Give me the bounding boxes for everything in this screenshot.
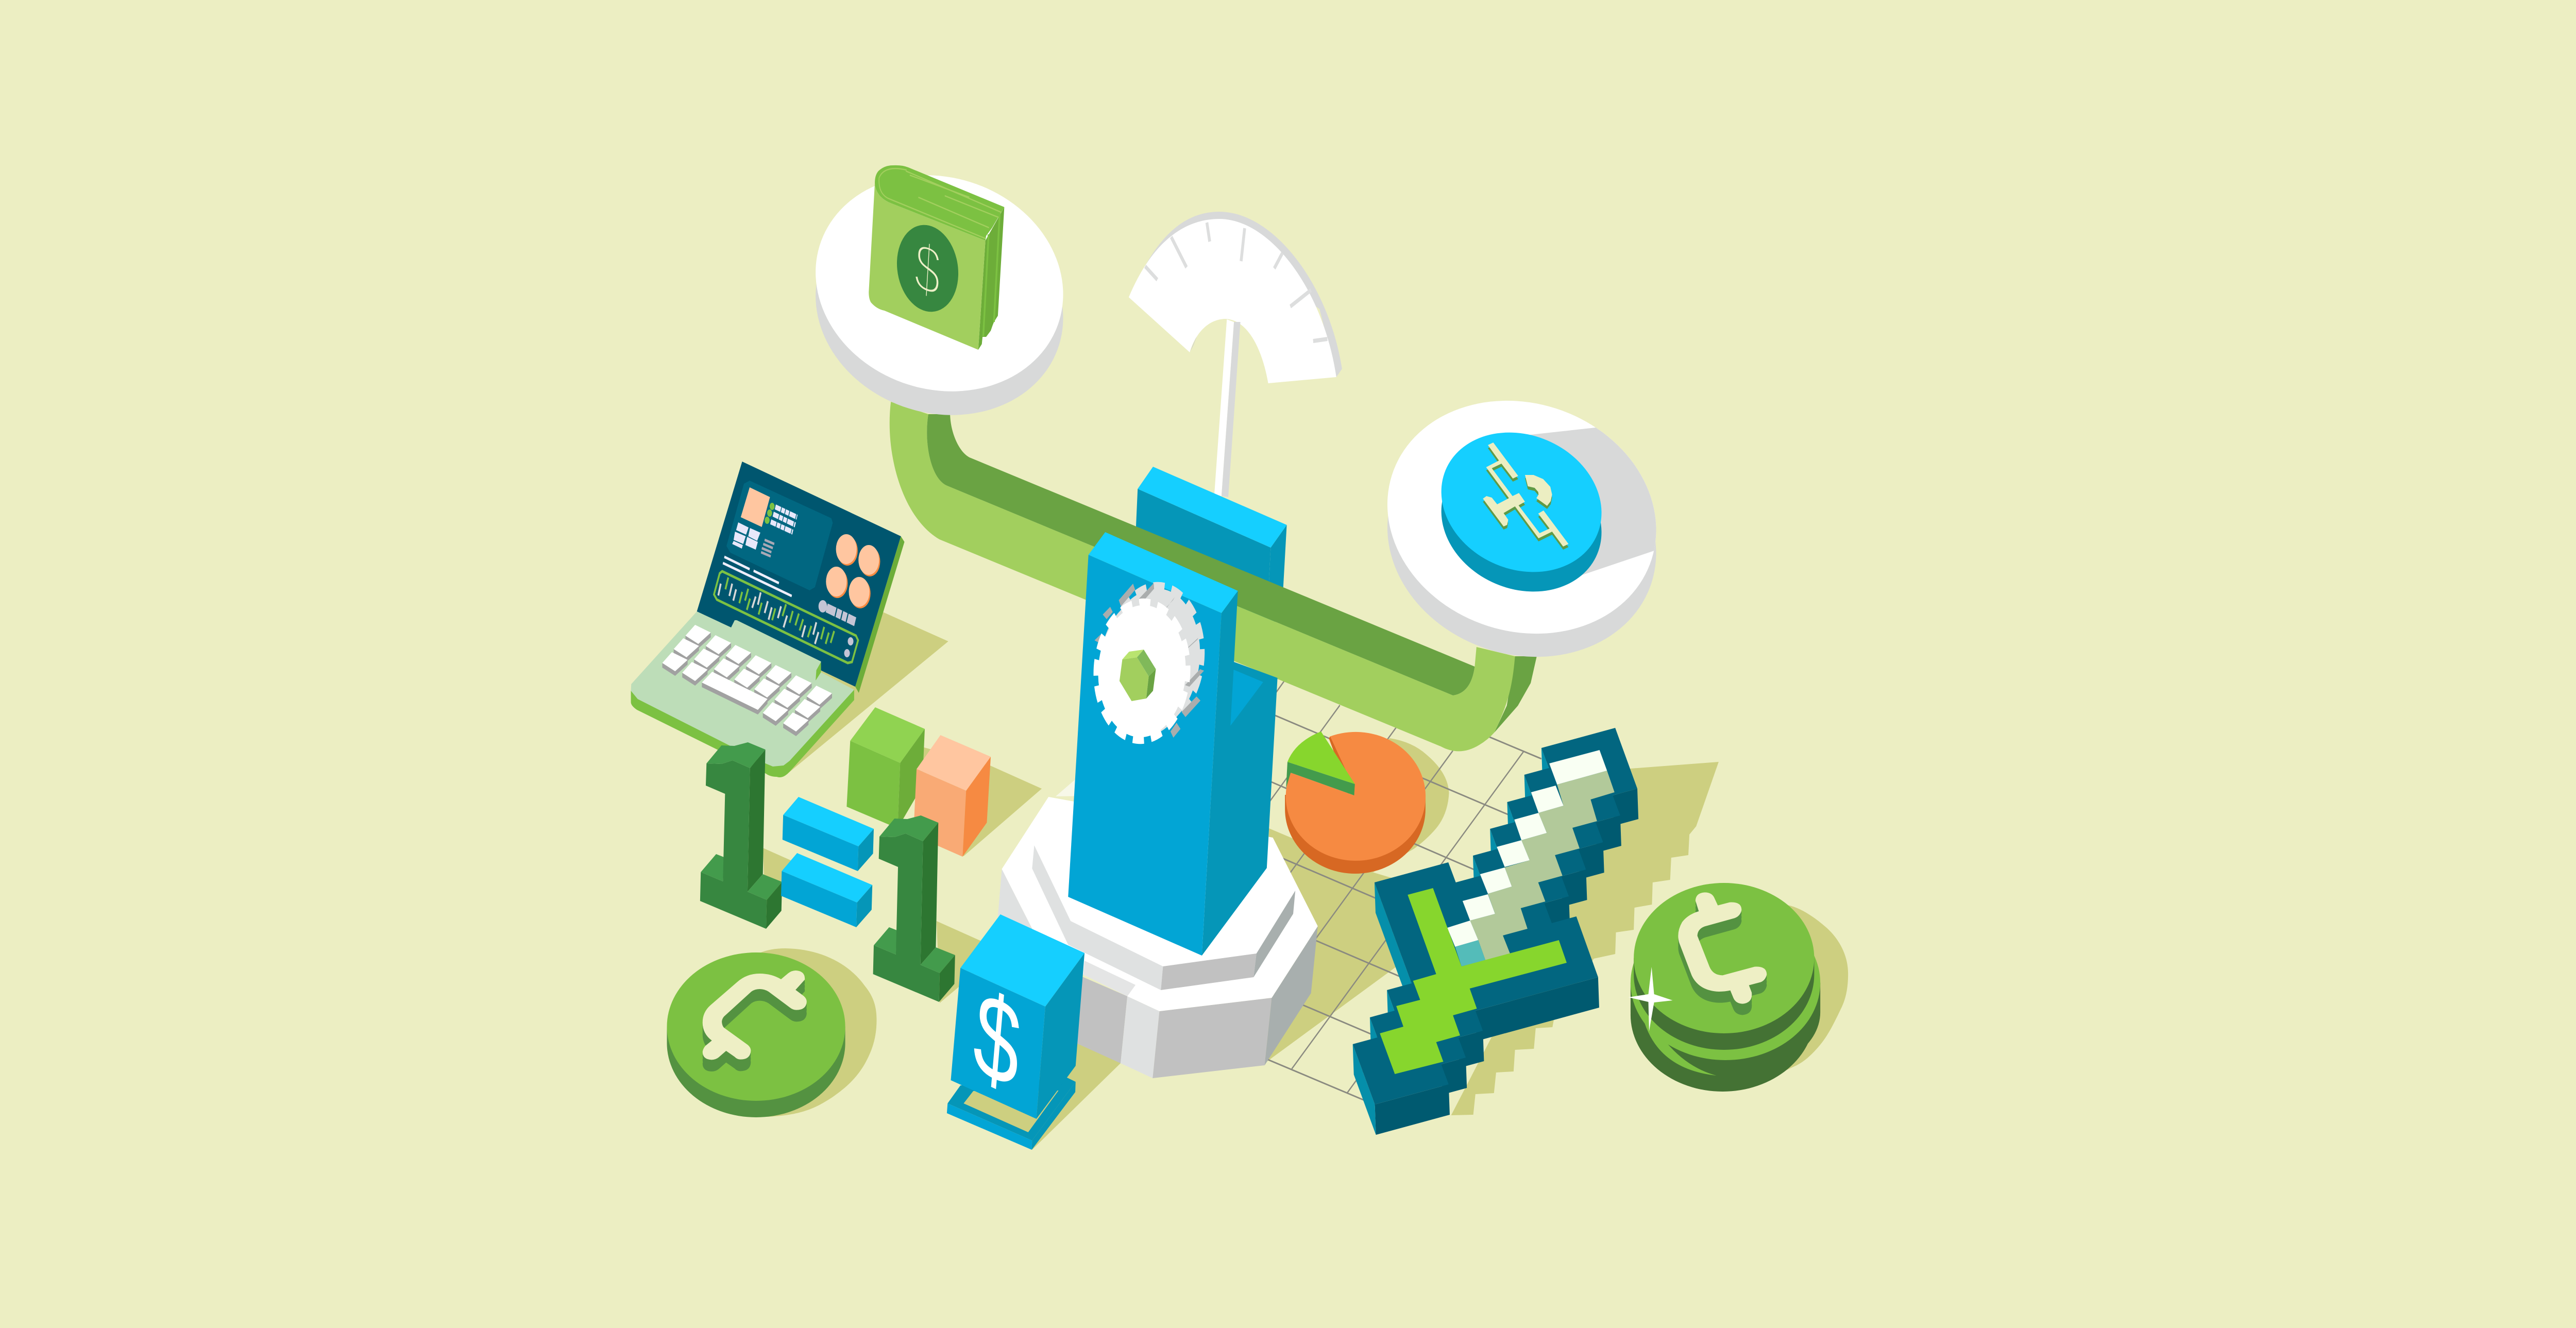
banknote dollar sign: $ — [912, 226, 943, 313]
keyboard keys — [662, 625, 832, 736]
back post block — [1132, 467, 1287, 670]
laptop shadow — [789, 612, 948, 772]
gear face — [1086, 587, 1198, 755]
laptop — [631, 462, 948, 777]
gear extrusion — [1086, 571, 1213, 755]
laptop base — [631, 611, 854, 777]
cursor left faces — [1353, 748, 1550, 1135]
sparkle — [1629, 967, 1673, 1031]
top coin — [1634, 883, 1814, 1050]
left cent coin — [667, 952, 845, 1117]
cursor outline surface — [1353, 728, 1637, 1104]
gauge needle — [1214, 319, 1241, 497]
gear tooth shading — [1094, 583, 1204, 738]
stack of banknotes — [869, 165, 1004, 350]
cursor green handle — [1380, 888, 1567, 1074]
coin glyph — [1483, 442, 1568, 547]
equals bottom bar — [781, 853, 872, 927]
bottom coins — [1631, 906, 1820, 1092]
gear hex nut — [1120, 650, 1156, 701]
cursor teal pixel — [1455, 940, 1485, 966]
grid floor — [1263, 681, 1551, 1105]
illustration canvas — [631, 165, 1849, 1150]
cube dollar sign: $ — [969, 964, 1025, 1115]
gear — [1086, 571, 1213, 755]
pie chart — [1285, 731, 1426, 874]
stack coin symbol — [1678, 892, 1767, 1004]
octagonal base — [997, 778, 1318, 1078]
dollar cube on stand — [947, 914, 1084, 1150]
gauge dial — [1129, 212, 1342, 383]
pie green slice — [1286, 731, 1355, 795]
coin glyph extrusion — [1483, 446, 1568, 550]
right plate — [1387, 401, 1656, 657]
coin stack — [1629, 883, 1820, 1092]
coin shadow on plate — [1530, 428, 1656, 575]
cursor sage fill — [1470, 771, 1615, 960]
coin symbol extrusion — [703, 975, 807, 1071]
balance beam — [890, 402, 1537, 751]
left plate — [809, 160, 1070, 431]
equals sign — [781, 797, 874, 927]
pixel cursor — [1353, 728, 1638, 1135]
blue coin on plate — [1435, 418, 1608, 606]
digit 1 right — [873, 815, 955, 1002]
stack coin symbol extrusion — [1678, 896, 1767, 1015]
peach cube — [913, 735, 991, 857]
digit 1 left — [700, 742, 782, 929]
green cube — [846, 707, 1042, 856]
laptop screen — [697, 462, 905, 693]
coin symbol — [703, 971, 807, 1060]
front post block — [1068, 532, 1278, 956]
ground shadows — [759, 738, 1848, 1150]
cube stand — [947, 1078, 1076, 1150]
cursor extrusion — [1375, 789, 1638, 1135]
banknote medallion — [885, 207, 971, 330]
equals top bar — [783, 797, 874, 871]
cursor white highlights — [1447, 750, 1607, 947]
